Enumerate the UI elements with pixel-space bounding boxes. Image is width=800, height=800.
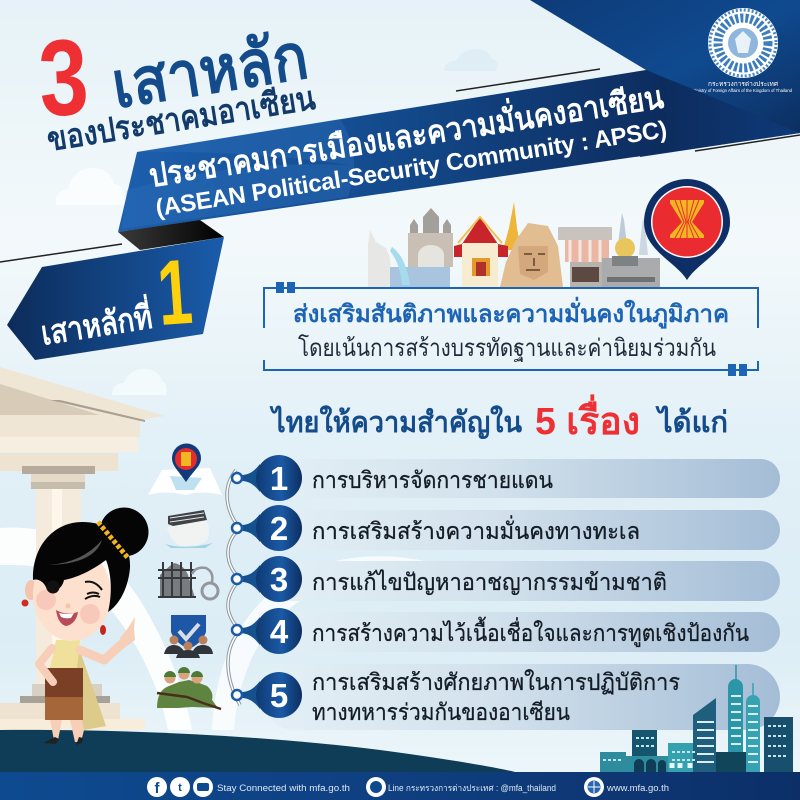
objective detail: โดยเน้นการสร้างบรรทัดฐานและค่านิยมร่วมกัน — [298, 334, 716, 362]
title number 3: 3 — [36, 16, 91, 139]
icon: shield with people — [164, 615, 213, 658]
main banner — [118, 70, 800, 232]
legs — [50, 720, 84, 742]
character — [22, 508, 148, 745]
decorative line left — [0, 244, 122, 262]
number markers — [232, 455, 302, 718]
pillar number: 1 — [154, 241, 195, 345]
skyline of ASEAN landmarks — [368, 202, 660, 287]
icon: ship — [165, 510, 213, 548]
item 4: การสร้างความไว้เนื้อเชื่อใจและการทูตเชิงป้องกัน — [312, 617, 749, 647]
torso — [50, 640, 80, 668]
item 4 — [262, 612, 780, 652]
dark ground band — [0, 730, 520, 773]
footer globe icon — [584, 777, 604, 797]
twin towers and mosque — [602, 213, 660, 287]
city skyline — [600, 665, 793, 772]
item 1: การบริหารจัดการชายแดน — [312, 467, 553, 493]
marker 1: 1 — [270, 460, 288, 497]
marker 2 — [232, 505, 302, 551]
objective box — [264, 282, 758, 376]
banner Thai heading: ประชาคมการเมืองและความมั่นคงอาเซียน — [146, 74, 666, 194]
pillar label: เสาหลักที่ — [38, 293, 155, 352]
temple — [0, 367, 165, 730]
marker 4 — [232, 608, 302, 654]
item 5 — [262, 664, 780, 730]
title — [36, 16, 318, 158]
item 5: ทางทหารร่วมกันของอาเซียน — [312, 699, 570, 725]
Angkor face tower — [500, 223, 563, 287]
footer social icons: f — [154, 780, 160, 797]
item 3 — [262, 561, 780, 601]
title main: เสาหลัก — [107, 20, 313, 122]
arm left — [39, 648, 53, 682]
icon: prison bars and handcuffs — [158, 562, 218, 599]
arm right — [80, 642, 124, 660]
golden stupa — [503, 202, 521, 250]
ministry name: กระทรวงการต่างประเทศ — [708, 81, 779, 88]
box frame — [264, 288, 758, 370]
footer line text: Line กระทรวงการต่างประเทศ : @mfa_thailand — [388, 783, 556, 793]
brow and wink — [85, 582, 102, 599]
nose — [66, 604, 70, 608]
item 1 — [262, 459, 780, 498]
icon: soldiers — [157, 667, 221, 709]
Patuxai gate — [408, 208, 453, 267]
top-right blue corner — [530, 0, 800, 157]
bun — [100, 508, 148, 556]
footer line icon — [366, 777, 386, 797]
marker 4: 4 — [270, 613, 289, 650]
pillar tag — [7, 237, 224, 360]
shawl — [64, 645, 106, 730]
skirt pattern — [45, 697, 83, 720]
mouth — [56, 610, 78, 626]
box corner squares — [276, 282, 747, 376]
mausoleum — [558, 227, 612, 287]
decorative line right — [695, 135, 800, 151]
section heading tail: ได้แก่ — [655, 405, 728, 439]
title sub: ของประชาคมอาเซียน — [44, 79, 318, 158]
objective heading: ส่งเสริมสันติภาพและความมั่นคงในภูมิภาค — [293, 296, 729, 329]
item rows — [262, 459, 780, 730]
item 2: การเสริมสร้างความมั่นคงทางทะเล — [312, 515, 640, 544]
decorative line top — [456, 69, 600, 91]
eye — [46, 580, 60, 594]
footer bar — [0, 772, 800, 800]
section heading — [269, 394, 728, 443]
ASEAN sheaf — [670, 200, 704, 238]
marker 2: 2 — [270, 510, 288, 547]
Thai temple — [454, 217, 508, 287]
skirt — [45, 668, 83, 720]
connector chain — [227, 470, 240, 705]
item 2 — [262, 510, 780, 550]
ASEAN map pin — [644, 179, 730, 280]
hairband — [98, 522, 128, 558]
banner English heading: (ASEAN Political-Security Community : APSC) — [154, 116, 669, 222]
ribbon fold — [118, 220, 224, 250]
hand — [120, 617, 135, 648]
footer social icons — [147, 777, 213, 797]
item 5: การเสริมสร้างศักยภาพในการปฏิบัติการ — [312, 669, 680, 695]
footer web text: www.mfa.go.th — [606, 783, 669, 793]
ears — [25, 580, 37, 600]
shoes — [43, 737, 83, 745]
footer connected text: Stay Connected with mfa.go.th — [217, 783, 350, 793]
marker 3 — [232, 556, 302, 602]
marker 5: 5 — [270, 677, 288, 714]
face — [33, 547, 111, 641]
ministry name: Ministry of Foreign Affairs of the Kingdom of Thailand — [692, 88, 793, 93]
hair — [33, 522, 130, 612]
section heading highlight: 5 เรื่อง — [535, 394, 640, 443]
item 3: การแก้ไขปัญหาอาชญากรรมข้ามชาติ — [312, 569, 667, 595]
icon: border map — [148, 444, 222, 495]
marker 1 — [232, 455, 302, 501]
earrings — [22, 600, 28, 606]
ministry emblem — [708, 8, 778, 78]
footer social icons: t — [178, 782, 182, 794]
cheeks — [36, 590, 56, 610]
marker 5 — [232, 672, 302, 718]
merlion — [368, 230, 450, 287]
marker 3: 3 — [270, 561, 288, 598]
clouds — [56, 49, 497, 395]
section heading: ไทยให้ความสำคัญใน — [269, 405, 522, 440]
hair highlight — [48, 540, 102, 565]
ministry name — [692, 81, 793, 93]
